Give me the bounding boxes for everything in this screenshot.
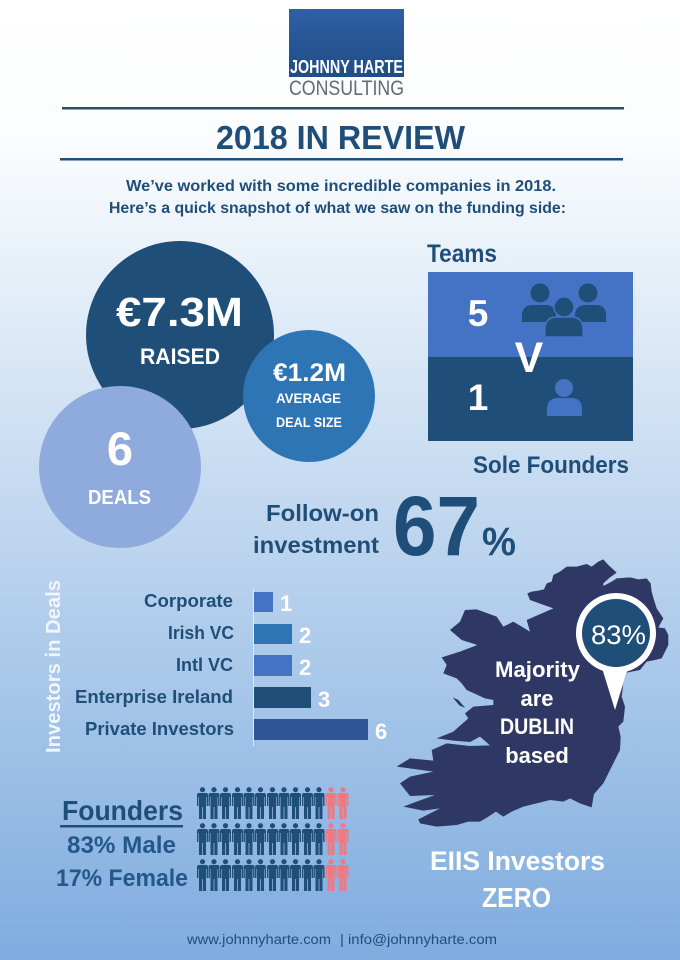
versus letter: V xyxy=(515,334,544,382)
footer contact xyxy=(186,932,497,947)
stat: follow-on investment xyxy=(253,479,516,573)
heading: teams: Teams xyxy=(427,240,497,268)
heading: sole founders: Sole Founders xyxy=(473,452,629,479)
bar: enterprise ireland: 3 xyxy=(318,687,330,712)
bar: corporate: Corporate xyxy=(144,591,233,611)
icon: single founder xyxy=(547,379,582,416)
bar: private investors: 6 xyxy=(375,719,387,744)
map of ireland xyxy=(397,559,668,827)
pictogram: founders xyxy=(197,787,348,891)
stat circle: deals: 6 xyxy=(107,422,133,475)
location pin: 83%: 83% xyxy=(591,620,646,650)
map caption: Majority xyxy=(495,657,581,682)
location pin: 83% xyxy=(576,593,656,710)
stat circle: average deal size: DEAL SIZE xyxy=(276,414,342,430)
bar: intl vc: Intl VC xyxy=(176,655,233,675)
eiis investors stat: EIIS Investors xyxy=(430,846,605,876)
bar: intl vc xyxy=(176,655,311,680)
map caption: DUBLIN xyxy=(500,714,574,739)
footer contact: | info@johnnyharte.com xyxy=(340,932,497,947)
eiis investors stat: ZERO xyxy=(482,882,551,913)
bar: irish vc xyxy=(168,623,311,648)
icon: team of three xyxy=(522,284,606,337)
teams count: 5 xyxy=(468,293,488,334)
bar: private investors: Private Investors xyxy=(85,719,234,739)
panel: teams versus sole founders xyxy=(427,240,633,479)
bar: irish vc: Irish VC xyxy=(168,623,234,643)
stat: follow-on investment: investment xyxy=(253,532,379,558)
founders gender split xyxy=(56,795,188,892)
stat circle: raised: €7.3M xyxy=(116,289,243,335)
logo xyxy=(289,9,404,100)
axis title: Investors in Deals xyxy=(43,580,65,753)
stat circle: average deal size xyxy=(243,330,375,462)
teams block xyxy=(428,272,633,357)
stat: follow-on investment: % xyxy=(482,520,516,564)
title: 2018 IN REVIEW xyxy=(216,119,466,156)
bar: enterprise ireland xyxy=(75,687,330,712)
logo: CONSULTING xyxy=(289,77,404,100)
sole founders count: 1 xyxy=(468,377,488,418)
stat circle: average deal size: €1.2M xyxy=(273,359,346,387)
stat circle: deals xyxy=(39,386,201,548)
bar: corporate: 1 xyxy=(280,591,292,616)
map caption: are xyxy=(520,686,554,711)
sole founders block xyxy=(428,357,633,441)
bar: corporate xyxy=(144,591,292,616)
intro text: We’ve worked with some incredible companies in 2018. xyxy=(126,178,556,195)
bar chart: investors in deals xyxy=(43,580,387,753)
map shape xyxy=(397,559,668,827)
footer contact: www.johnnyharte.com xyxy=(186,932,331,947)
bar: irish vc: 2 xyxy=(299,623,311,648)
bar: enterprise ireland: Enterprise Ireland xyxy=(75,687,233,707)
female share: 17% Female xyxy=(56,865,188,892)
map caption xyxy=(495,657,581,768)
stat circle: raised: RAISED xyxy=(140,344,220,369)
logo: JOHNNY HARTE xyxy=(290,57,403,77)
stat circle: raised xyxy=(86,241,274,429)
intro text: Here’s a quick snapshot of what we saw on the funding side: xyxy=(109,200,566,217)
map caption: based xyxy=(505,743,569,768)
stat circle: average deal size: AVERAGE xyxy=(276,390,341,406)
eiis investors stat xyxy=(430,846,605,913)
founders heading: Founders xyxy=(62,795,183,826)
male figures xyxy=(197,787,324,891)
male share: 83% Male xyxy=(67,832,176,859)
intro text xyxy=(109,178,566,217)
female figures xyxy=(326,787,348,891)
bar: intl vc: 2 xyxy=(299,655,311,680)
stat circle: deals: DEALS xyxy=(88,487,151,509)
stat: follow-on investment: Follow-on xyxy=(266,500,379,526)
bar: private investors xyxy=(85,719,387,744)
stat: follow-on investment: 67 xyxy=(393,479,480,573)
